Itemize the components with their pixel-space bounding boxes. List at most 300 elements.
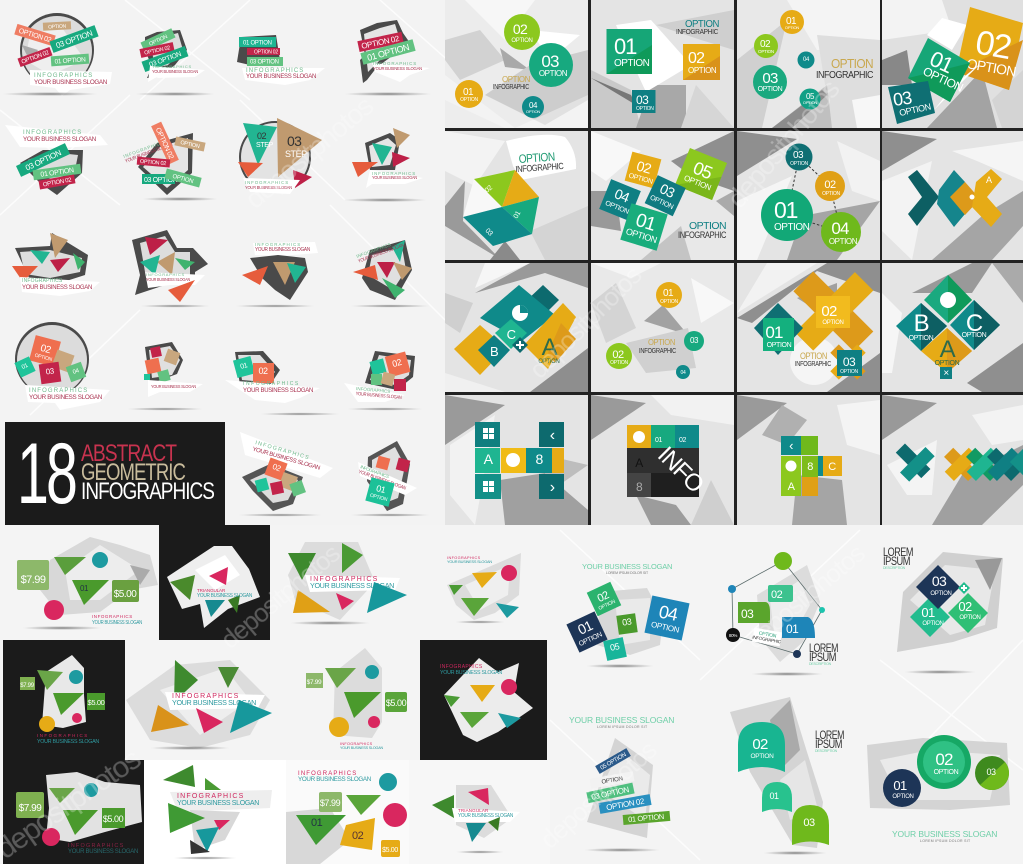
diamond: B: B [490,344,498,359]
segment: lime: 02 [484,184,494,195]
panel: slide 6, crossed ribbons [123,122,218,201]
slogan: YOUR BUSINESS SLOGAN [582,562,672,571]
square: red 03: 03 [45,366,55,377]
watermark: depositphotos [721,74,845,214]
triangle: tan [273,262,295,285]
circle 01 [455,80,483,108]
square: red [150,346,162,358]
label: 5.00: $5.00 [382,847,398,854]
panel: triangle slide J [144,760,286,864]
slogan text: YOUR BUSINESS SLOGAN [255,247,311,253]
slogan text: INFOGRAPHICS [360,464,390,479]
label: red: OPTION 02 [254,50,278,56]
diamond 01 [910,597,950,637]
square 02 [956,7,1023,90]
triangle: green 01 [53,693,84,715]
triangle: green [175,258,195,270]
triangle: red [336,593,354,610]
slogan text: YOUR BUSINESS SLOGAN [243,388,313,394]
caption [514,149,564,174]
circle 02: OPTION [822,191,840,197]
square: teal [369,358,387,376]
shape: pink [42,828,60,846]
heading: lorem ipsum: IPSUM [883,554,910,568]
label: price 7.99 [17,560,49,590]
slogan text: INFOGRAPHICS [310,576,378,583]
ribbon: teal: 03 OPTION [144,177,178,184]
circle 02: 02 [612,349,624,361]
ribbon: red: OPTION 02 [360,34,401,51]
triangle: yellow [293,590,330,613]
ribbon: red: OPTION 02 [140,159,166,167]
slogan text: INFOGRAPHICS [177,793,244,800]
triangle: green 03 [346,795,381,815]
heading: geometric: GEOMETRIC [81,459,186,486]
caption: INFOGRAPHIC [678,230,727,240]
label: price 5.00 [112,580,139,602]
diamond: C: C [966,310,983,337]
slogan text [310,576,394,590]
circle 01: 01 [774,197,798,223]
slogan text: YOUR BUSINESS SLOGAN [310,581,394,590]
square 01: 01 [926,46,957,78]
diamond: B: OPTION [909,335,934,342]
square 02: 02 [635,158,654,177]
cell: yellow [552,448,564,473]
panel: slide 17, slanted slogan with squares [238,432,333,516]
title block: 18 abstract geometric infographics [5,422,225,525]
icon: close square: × [943,368,949,379]
circle 01 [883,769,921,807]
square: salmon 02: 02 [39,343,53,356]
square 02: 02 [688,50,705,67]
label: 5.00: $5.00 [103,814,124,824]
circle 04: OPTION [526,109,540,114]
triangle: small green [228,595,240,613]
slogan text [372,171,418,181]
triangle: dark [190,840,210,854]
slogan text [22,278,92,291]
caption: INFOGRAPHIC [816,70,873,81]
triangle: pink [468,788,489,805]
square 02 [625,152,661,188]
cell: yellow C [823,456,842,476]
arch 01 [762,782,792,812]
square: salmon 02: 02 [258,366,268,376]
triangle: tan [50,233,68,258]
square 01: 01 [575,617,596,638]
panel: grid r1c1 circles [445,0,588,128]
diamond: C: OPTION [962,332,987,339]
slogan text: TRIANGULAR [197,588,226,593]
caption [639,338,677,355]
segment: yellow [502,170,539,207]
slogan text: INFOGRAPHICS [356,386,390,394]
slogan: YOUR BUSINESS SLOGAN [569,715,674,725]
cell: icon lower [475,474,501,499]
slogan text [243,381,313,394]
panel: grid r3c2 circles around caption [591,263,734,392]
card: option infographic: OPTION [758,631,777,640]
panel: grid r2c3 linked circles [737,131,880,260]
square 04: OPTION [650,620,680,635]
dark block with INFO: A [635,456,643,470]
heading: lorem ipsum: LOREM [809,641,838,655]
shape: pink [383,803,407,827]
slogan text: INFOGRAPHICS [246,68,303,74]
slogan text: YOUR BUSINESS SLOGAN [124,142,174,165]
square 05: 05 [690,158,716,183]
diamond: B [478,335,510,367]
node: teal [819,607,825,613]
ribbon: mint: OPTION [148,34,169,48]
panel: triangle slide F [126,660,272,750]
square 02: OPTION [628,173,654,186]
slogan text: INFOGRAPHICS [146,272,185,277]
slogan text: YOUR BUSINESS SLOGAN [29,394,103,401]
slogan text: YOUR BUSINESS SLOGAN [177,800,259,807]
triangle: teal [287,263,306,283]
diamond 02 [948,593,988,633]
square 02: OPTION [822,320,844,326]
cell: lime pie [781,456,801,477]
square 03 [837,350,862,376]
square 04 [599,179,641,221]
triangle: yellow [151,705,189,732]
slogan text: INFOGRAPHICS [340,742,373,746]
icon: plus [958,582,970,594]
slogan text [298,771,372,783]
square: salmon 02 [29,335,61,367]
slogan text [373,61,423,72]
square 02: OPTION [598,599,617,612]
label: 7.99: $7.99 [20,683,35,689]
slogan: YOUR BUSINESS SLOGAN [892,829,997,839]
caption: OPTION [800,351,827,361]
triangle: orange [168,280,195,302]
slogan text: YOUR BUSINESS SLOGAN [245,185,293,191]
triangle: red [196,708,223,733]
slogan text: INFOGRAPHICS [373,61,416,66]
triangle: green [432,795,454,818]
triangle: teal [140,255,160,275]
circle 02 [754,34,778,58]
X shape: yellow and orange [793,271,873,351]
ribbon: green: 03 OPTION [590,785,630,802]
triangle: green [205,778,221,790]
square: tan [381,372,395,386]
panel: grid r2c2 rotated squares [591,131,734,260]
circle 01: OPTION [774,222,810,233]
square: teal 01: 01 [21,363,30,371]
diamond: green with pie [924,275,972,323]
triangle: dark green [163,765,195,787]
square: teal 01 [365,477,395,507]
slogan text [146,272,190,282]
square 01: OPTION [921,64,965,95]
panel: slide 4, two ribbons [344,20,432,96]
circle 03 [753,65,787,99]
circle 01: 01 [786,16,797,27]
cell: chevron lower [539,474,564,499]
panel: slide 1, circle with ribbons [2,13,112,96]
circle 05: OPTION [803,100,817,105]
cell: teal: 02 [679,437,687,444]
square 03 [645,175,686,216]
ribbon: red: OPTION 02 [43,177,73,188]
triangle: red [50,258,70,272]
caption: OPTION [518,150,555,166]
slogan text [245,180,293,191]
slogan text [172,693,256,707]
panel: slide 18, slanted banner with squares [350,441,430,516]
square 01 [606,29,652,74]
circle 05 [800,88,820,110]
node: navy [793,650,801,658]
panel: grid r4c4 X row [882,395,1023,525]
heading: lorem ipsum: LOREM [815,728,844,742]
label: 7.99: $7.99 [307,679,322,686]
panel: grid r4c1 block H [445,395,588,525]
circle 02: OPTION [511,38,533,44]
shape: pink [72,713,82,723]
circle 04: 04 [803,57,810,63]
triangle: green 02 [461,598,489,616]
triangle: orange [12,266,38,282]
caption [493,75,531,91]
triangle: teal [466,823,486,842]
label: 7.99: $7.99 [320,798,341,808]
shape: yellow [39,716,55,732]
slogan text [29,388,103,401]
ribbon: salmon 02: OPTION 02 [18,28,52,44]
X: teal partial [1010,448,1023,476]
circle 03: 03 [762,70,778,87]
triangle: tan step 03: STEP [285,149,307,159]
triangle: green [170,575,195,600]
square: teal 01: 01 [375,483,387,495]
slogan text: YOUR BUSINESS SLOGAN [358,469,407,492]
triangle: red [293,170,312,188]
square 01: OPTION [625,226,658,245]
panel: grid r2c4 X shapes [882,131,1023,260]
square 04 [644,595,690,641]
triangle: orange [242,266,268,285]
triangle: green 04 [168,803,205,833]
circle 03 [684,331,704,351]
ribbon: teal: 03 OPTION [24,148,63,173]
circle 03: 03 [690,336,699,345]
slogan [582,562,672,575]
panel: triangle slide I, dark [3,760,144,864]
ribbon: teal: 03 OPTION [148,51,183,69]
square: green [289,480,306,497]
square 03: 03 [622,616,632,628]
square 03: 03 [657,180,678,201]
watermark [0,74,871,864]
slogan text [177,793,259,807]
caption: INFOGRAPHIC [639,346,677,355]
slogan text [440,664,503,676]
circle 01: 01 [893,778,907,793]
caption: OPTION [502,75,531,84]
triangle: yellow [472,572,497,588]
label: 7.99: $7.99 [19,803,42,814]
cell: yellow icon [802,477,818,496]
diamond 03: OPTION [930,591,952,597]
square 01: OPTION [614,58,650,69]
triangle: teal [392,240,405,262]
slogan text [152,64,198,74]
triangle: green 01 [63,810,98,835]
slogan text: INFOGRAPHICS [68,843,124,849]
square: green [371,374,382,385]
triangle: tan [393,262,412,280]
diamond: big teal [480,285,555,341]
ribbon: tan: OPTION [180,140,200,150]
watermark: depositphotos [215,538,346,655]
cell: B [526,448,552,473]
square 05: OPTION [683,173,713,193]
square 03: 03 [636,93,649,107]
card: option infographic [752,628,783,647]
panel: grid r3c4 ABC diamonds [882,263,1023,392]
shape: teal [379,773,397,791]
slogan text: INFOGRAPHICS [172,693,239,700]
square: green [157,369,171,383]
panel: slide 12, slanted slogan [350,238,430,308]
square: teal 01: 01 [240,362,249,371]
panel: slide 14, squares [127,342,203,410]
label: price 5.00: $5.00 [114,589,137,600]
plus icon [512,337,528,353]
circle 02: OPTION [758,49,774,54]
heading: abstract: ABSTRACT [81,440,177,467]
slogan text: YOUR BUSINESS SLOGAN [373,66,423,72]
slogan text: YOUR BUSINESS SLOGAN [355,391,402,401]
panel: slide 10, triangles with slogan [132,230,210,308]
square 02: OPTION [965,55,1017,80]
triangle: teal [372,143,392,165]
panel: slide 7, circle with triangles [238,118,322,194]
cell: chevron lower: › [550,479,555,496]
slogan text [458,808,514,819]
caption: INFOGRAPHIC [493,82,530,91]
circle 01: 01 [463,87,474,98]
circle 02 [815,171,845,201]
arch 03 [792,805,829,845]
triangle: green [73,253,85,270]
shape: pink [368,716,380,728]
triangle: tan step 03 [277,118,322,177]
heading: lorem ipsum: DESCRIPTION [883,566,906,570]
cell: B: 8 [535,451,543,467]
diamond: dark teal [754,303,803,355]
triangle: green 01 [72,580,109,605]
card: option infographic: INFOGRAPHIC [752,635,782,645]
heading: lorem ipsum [883,545,913,570]
triangle: teal step 02: 02 [257,131,267,141]
slogan text [37,733,100,745]
circle 01: OPTION [460,97,478,103]
label: teal: 01 OPTION [243,40,272,46]
triangle: red [392,152,410,167]
square 02 [587,582,621,616]
square 03 [632,90,656,113]
square 02: 02 [973,23,1014,67]
ribbon: salmon: OPTION 02 [154,127,175,160]
diamond: C [950,300,1000,350]
slogan text: INFOGRAPHICS [23,130,81,136]
slogan text: INFOGRAPHICS [447,556,481,560]
triangle: teal [230,700,272,733]
panel: corporate slide 3, diamonds [883,545,1003,674]
square 01: OPTION [767,342,792,349]
square 04: 04 [612,185,632,206]
label: 5.00: $5.00 [88,698,105,707]
segment: green [502,197,539,234]
square 01 [763,318,794,351]
label 02: 02 [771,589,783,601]
slogan text: YOUR BUSINESS SLOGAN [34,79,108,86]
square 03: 03 [843,355,856,369]
ribbon: green: 01 OPTION [54,56,86,66]
square 02: 02 [596,589,611,605]
cell: lime A: A [788,481,796,493]
label: 7.99 [16,792,44,818]
small X: yellow [830,344,866,380]
slogan text: YOUR BUSINESS SLOGAN [340,745,383,750]
caption [678,221,727,240]
dark block with INFO [627,442,709,498]
circle 01: OPTION [660,299,678,305]
centre dot [970,194,974,200]
panel: grid r1c2 squares [591,0,734,128]
square: red [396,458,410,472]
slogan text: INFOGRAPHICS [245,180,288,185]
diamond 01: OPTION [922,621,944,627]
connector lines [787,157,841,232]
triangle: green 01 [344,692,381,718]
diamond: yellow right with A [524,303,576,369]
slogan text: YOUR BUSINESS SLOGAN [458,813,514,819]
ribbon: green: OPTION [172,174,194,185]
slogan text [340,742,383,750]
ribbon: green: 01 OPTION [366,42,410,63]
panel: grid r1c3 circles [737,0,880,128]
cell: icon [475,422,500,447]
X: orange [944,448,978,481]
circle 01: OPTION [892,794,914,800]
circle 02: 02 [824,179,836,191]
slogan text: YOUR BUSINESS SLOGAN [68,849,138,855]
circle 05: 05 [806,92,815,101]
diamond: orange [950,182,980,215]
circle 01 [780,10,804,34]
diamond 01: 01 [921,605,935,620]
square 01 [620,203,668,251]
circle 02: OPTION [610,360,628,366]
slogan text: YOUR BUSINESS SLOGAN [22,285,92,291]
shape: yellow [329,717,349,737]
panel: grid r4c3 lime blocks [737,395,880,525]
shape: teal [92,552,108,568]
node: lime [774,552,792,570]
square 05 [675,148,727,200]
shape: teal [365,665,379,679]
cell: A: A [484,451,494,467]
circle 04: OPTION [829,237,858,246]
